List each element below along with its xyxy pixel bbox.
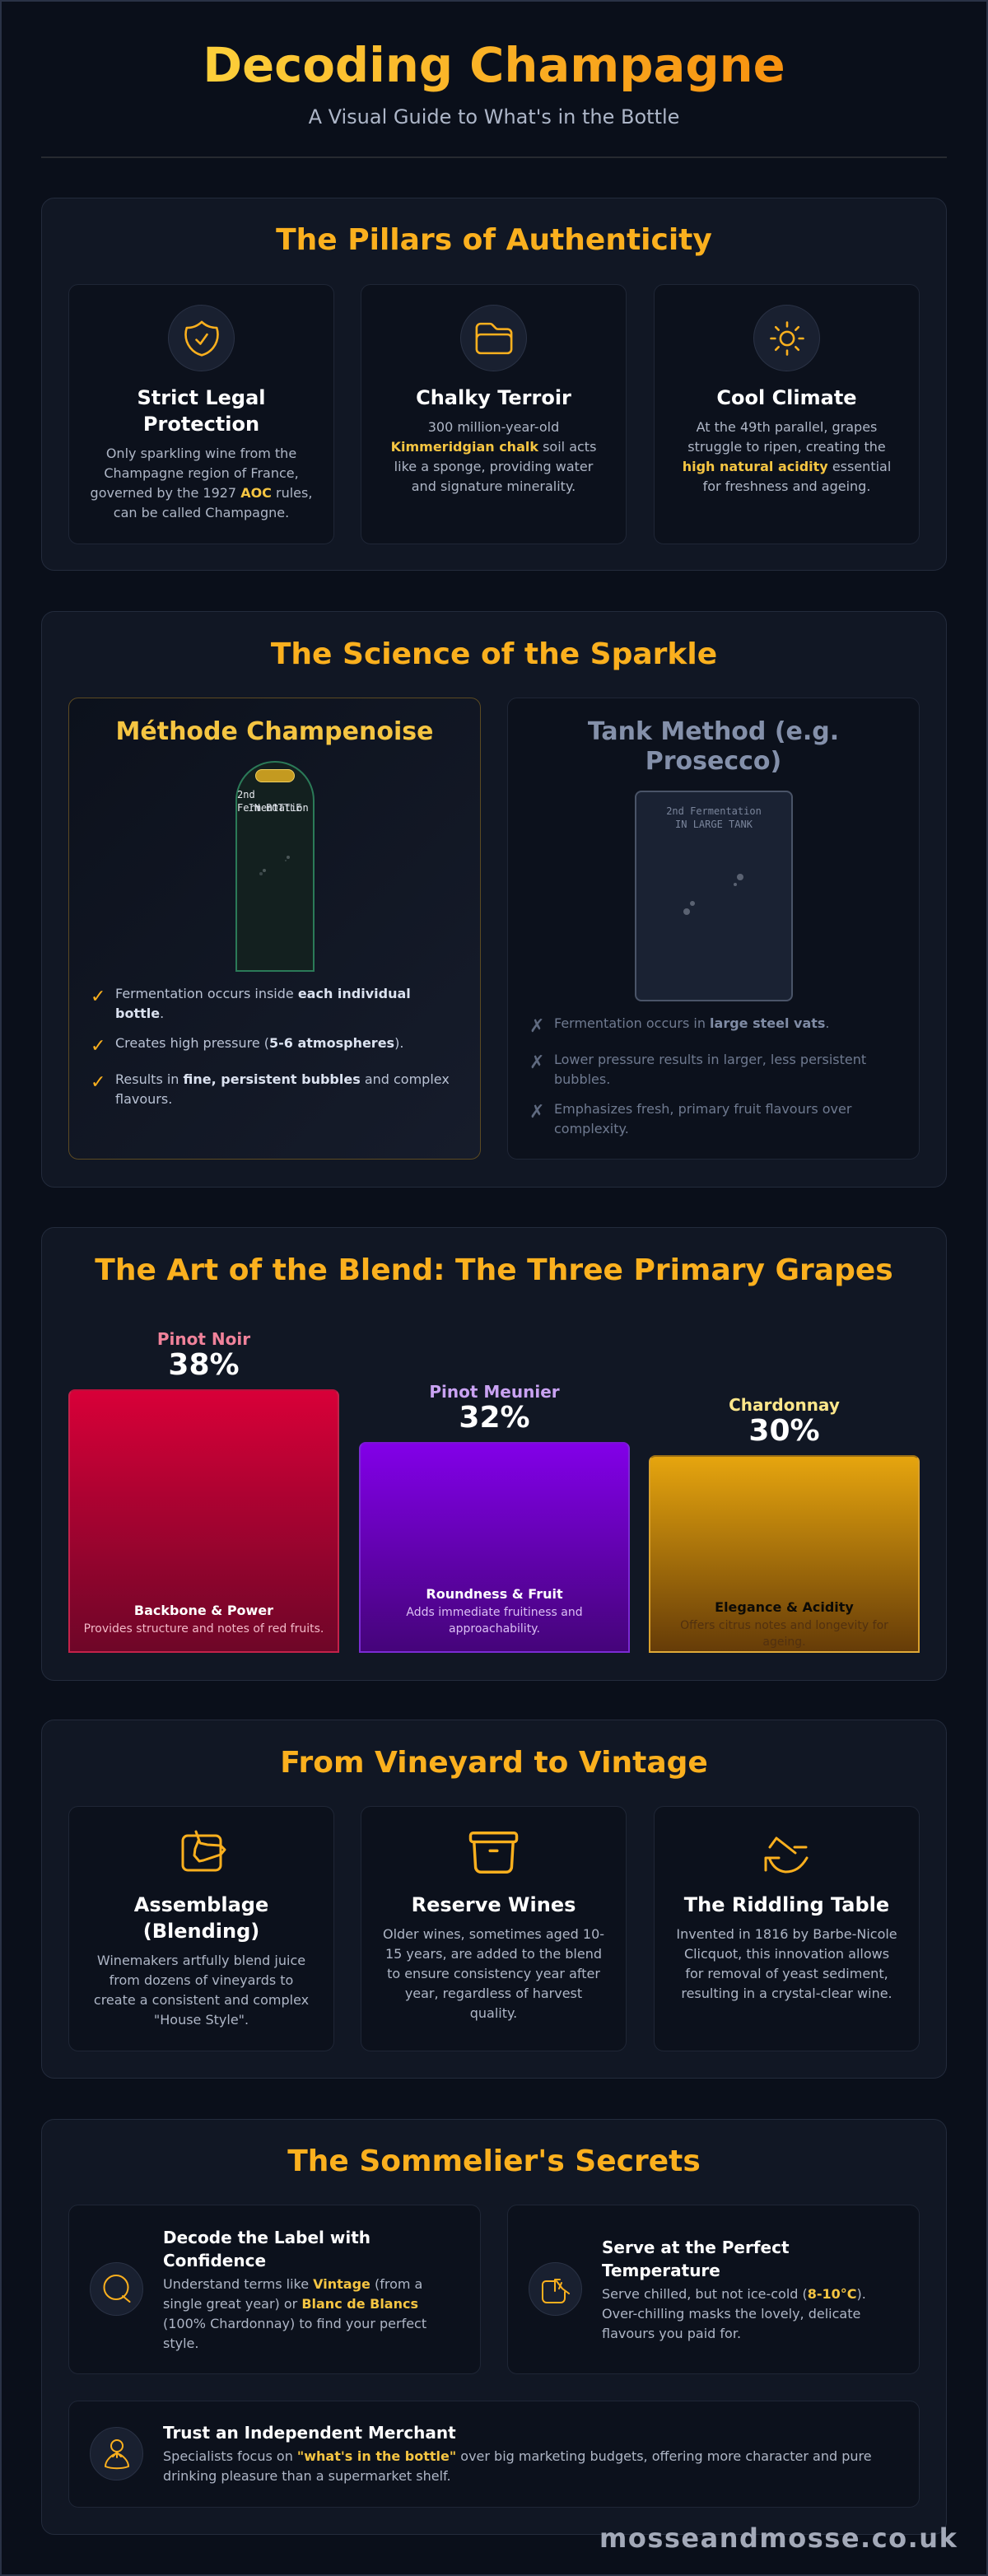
- item: Fermentation occurs in large steel vats.: [554, 1015, 830, 1031]
- column chart: pinot noir: [68, 1329, 339, 1653]
- item: bubbles.: [554, 1071, 610, 1087]
- tank heading: Prosecco): [645, 747, 781, 776]
- card text: Winemakers artfully blend juice: [97, 1953, 305, 1968]
- card: serve temperature: [507, 2205, 920, 2374]
- card heading: [133, 1893, 268, 1943]
- item: Creates high pressure (5-6 atmospheres).: [115, 1035, 403, 1051]
- text: ✗: [529, 1016, 544, 1037]
- bar: [649, 1455, 920, 1653]
- card text: [91, 446, 312, 520]
- text: ✗: [529, 1102, 544, 1122]
- tip text: Confidence: [163, 2251, 266, 2270]
- percentage: 38%: [168, 1348, 240, 1382]
- heading: from vineyard to vintage: From Vineyard to Vintage: [280, 1746, 708, 1780]
- card text: Champagne region of France,: [104, 465, 299, 481]
- card text: [94, 1953, 309, 2028]
- card text: for removal of yeast sediment,: [685, 1966, 888, 1981]
- tip detail: style.: [163, 2336, 198, 2351]
- icon: folder: [460, 305, 527, 371]
- bar text: Offers citrus notes and longevity for: [680, 1619, 888, 1632]
- header: [203, 38, 785, 128]
- text: ✓: [91, 1036, 105, 1057]
- grape name: Pinot Noir: [157, 1329, 250, 1349]
- card text: create a consistent and complex: [94, 1992, 309, 2008]
- tip text: Temperature: [602, 2261, 720, 2280]
- bar text: Provides structure and notes of red fruits.: [84, 1622, 324, 1636]
- bar title: Backbone & Power: [134, 1603, 273, 1618]
- tip text: Serve at the Perfect: [602, 2238, 790, 2257]
- card: cool climate: [654, 284, 920, 544]
- title: Decoding Champagne: [203, 38, 785, 93]
- card text: like a sponge, providing water: [394, 459, 593, 474]
- card heading: Chalky Terroir: [416, 386, 571, 409]
- tip detail: Understand terms like Vintage (from a: [163, 2276, 422, 2292]
- grape name: Chardonnay: [729, 1395, 840, 1415]
- tank label: [666, 805, 762, 830]
- card text: Clicquot, this innovation allows: [684, 1946, 889, 1962]
- tip text: [163, 2228, 370, 2270]
- heading: the sommelier's secrets: The Sommelier's Secrets: [287, 2144, 701, 2178]
- item: Emphasizes fresh, primary fruit flavours over: [554, 1101, 851, 1117]
- tip detail: flavours you paid for.: [602, 2326, 741, 2341]
- icon: riddling arrows: [764, 1836, 809, 1873]
- bubbles: [683, 874, 743, 915]
- tank heading: [588, 717, 839, 776]
- text: ✓: [91, 987, 105, 1007]
- tank heading: Tank Method (e.g.: [588, 717, 839, 746]
- card text: [391, 419, 596, 494]
- card text: high natural acidity essential: [683, 459, 891, 474]
- bottle label: 2nd: [237, 789, 255, 800]
- panel: from vineyard to vintage: [41, 1720, 947, 2079]
- item: complexity.: [554, 1121, 629, 1136]
- column chart: chardonnay: [649, 1395, 920, 1653]
- icon: shield: [168, 305, 235, 371]
- column chart: pinot meunier: [359, 1382, 630, 1653]
- bar text: [680, 1619, 888, 1649]
- icon: archive box: [469, 1832, 519, 1874]
- card heading: (Blending): [143, 1920, 259, 1943]
- panel: the sommelier's secrets: [41, 2119, 947, 2535]
- list: methode benefits: [91, 986, 450, 1107]
- bar: [359, 1442, 630, 1653]
- tank label: 2nd Fermentation: [666, 805, 762, 817]
- percentage: 30%: [748, 1414, 820, 1448]
- card text: quality.: [470, 2005, 517, 2021]
- card text: 300 million-year-old: [428, 419, 559, 435]
- tip detail: Specialists focus on "what's in the bottle" over big marketing budgets, offering more character and pure: [163, 2448, 872, 2464]
- tip detail: Serve chilled, but not ice-cold (8-10°C).: [602, 2286, 866, 2302]
- card heading: Assemblage: [134, 1893, 268, 1916]
- icon: blending glass: [181, 1830, 226, 1871]
- item: [529, 1101, 851, 1136]
- item: [91, 986, 411, 1021]
- item: Fermentation occurs inside each individual: [115, 986, 411, 1001]
- heading: the science of the sparkle: The Science of the Sparkle: [271, 637, 717, 671]
- bar: [68, 1389, 339, 1653]
- icon: thermometer glass: [529, 2262, 582, 2316]
- item: Lower pressure results in larger, less persistent: [554, 1052, 866, 1067]
- panel: methode champenoise: [68, 698, 481, 1160]
- card heading: Reserve Wines: [412, 1893, 576, 1916]
- bottle label overlap: IN BOTTLE: [248, 802, 302, 814]
- list: tank drawbacks: [529, 1015, 866, 1136]
- card heading: Strict Legal: [137, 386, 266, 409]
- icon: magnifier: [90, 2262, 143, 2316]
- card heading: [137, 386, 266, 436]
- tip detail: [602, 2286, 866, 2341]
- bottle body: [235, 761, 315, 972]
- card: reserve wines: [361, 1806, 627, 2051]
- card text: [676, 1926, 897, 2001]
- method heading: Méthode Champenoise: [116, 717, 433, 746]
- card heading: Protection: [143, 413, 259, 436]
- text: ✗: [529, 1052, 544, 1073]
- card: assemblage: [68, 1806, 334, 2051]
- card heading: The Riddling Table: [684, 1893, 889, 1916]
- card: chalky terroir: [361, 284, 627, 544]
- panel: the art of the blend: [41, 1227, 947, 1681]
- percentage: 32%: [459, 1401, 530, 1435]
- tip detail: [163, 2276, 426, 2351]
- subtitle: A Visual Guide to What's in the Bottle: [309, 105, 679, 128]
- item: Results in fine, persistent bubbles and complex: [115, 1071, 450, 1087]
- icon: person: [90, 2427, 143, 2480]
- panel: tank method: [507, 698, 920, 1160]
- card text: 15 years, are added to the blend: [385, 1946, 602, 1962]
- card text: year, regardless of harvest: [405, 1986, 582, 2001]
- card text: and signature minerality.: [412, 478, 576, 494]
- card text: resulting in a crystal-clear wine.: [681, 1986, 892, 2001]
- bottle cork: [255, 769, 295, 782]
- item: [529, 1052, 866, 1087]
- item: [91, 1071, 450, 1107]
- bar title: Roundness & Fruit: [426, 1586, 563, 1602]
- heading: the pillars of authenticity: The Pillars of Authenticity: [276, 223, 712, 257]
- card text: to ensure consistency year after: [387, 1966, 600, 1981]
- card text: Invented in 1816 by Barbe-Nicole: [676, 1926, 897, 1942]
- tip detail: drinking pleasure than a supermarket shelf.: [163, 2468, 451, 2484]
- item: [91, 1035, 403, 1057]
- tip detail: Over-chilling masks the lovely, delicate: [602, 2306, 860, 2322]
- tip text: Decode the Label with: [163, 2228, 370, 2247]
- item: bottle.: [115, 1006, 164, 1021]
- card text: "House Style".: [154, 2012, 249, 2028]
- tank label: IN LARGE TANK: [675, 819, 753, 830]
- tip detail: [163, 2448, 872, 2484]
- card text: [683, 419, 891, 494]
- card: strict legal protection: [68, 284, 334, 544]
- card heading: Cool Climate: [716, 386, 857, 409]
- card text: governed by the 1927 AOC rules,: [91, 485, 312, 501]
- card text: Older wines, sometimes aged 10-: [383, 1926, 604, 1942]
- card text: Kimmeridgian chalk soil acts: [391, 439, 596, 455]
- card text: Only sparkling wine from the: [106, 446, 296, 461]
- item: flavours.: [115, 1091, 172, 1107]
- card: decode the label: [68, 2205, 481, 2374]
- bar text: [406, 1606, 583, 1636]
- card: riddling table: [654, 1806, 920, 2051]
- card text: can be called Champagne.: [114, 505, 289, 520]
- tip detail: (100% Chardonnay) to find your perfect: [163, 2316, 426, 2331]
- bar title: Elegance & Acidity: [715, 1599, 854, 1615]
- heading: the art of the blend: The Art of the Blend: The Three Primary Grapes: [95, 1253, 893, 1287]
- watermark: mosseandmosse.co.uk: [599, 2522, 958, 2554]
- bubbles: [259, 856, 290, 875]
- card text: struggle to ripen, creating the: [687, 439, 886, 455]
- tip text: [602, 2238, 790, 2280]
- bottle label: Fermentation: [237, 802, 309, 814]
- item: [529, 1015, 830, 1037]
- tip detail: single great year) or Blanc de Blancs: [163, 2296, 418, 2312]
- grape name: Pinot Meunier: [429, 1382, 560, 1402]
- bar text: ageing.: [762, 1636, 806, 1649]
- diagram: tank: [635, 791, 793, 1001]
- panel: the science of the sparkle: [41, 611, 947, 1188]
- card text: for freshness and ageing.: [703, 478, 870, 494]
- card text: At the 49th parallel, grapes: [697, 419, 877, 435]
- bar text: approachability.: [449, 1622, 540, 1636]
- tip text: Trust an Independent Merchant: [163, 2423, 456, 2443]
- panel: the pillars of authenticity: [41, 198, 947, 571]
- card: trust a merchant: [68, 2401, 920, 2508]
- card text: [383, 1926, 604, 2021]
- bottle label: [237, 789, 309, 814]
- icon: sun: [753, 305, 820, 371]
- card text: from dozens of vineyards to: [110, 1972, 293, 1988]
- bar text: Adds immediate fruitiness and: [406, 1606, 583, 1619]
- diagram: bottle: [235, 761, 315, 972]
- text: ✓: [91, 1072, 105, 1093]
